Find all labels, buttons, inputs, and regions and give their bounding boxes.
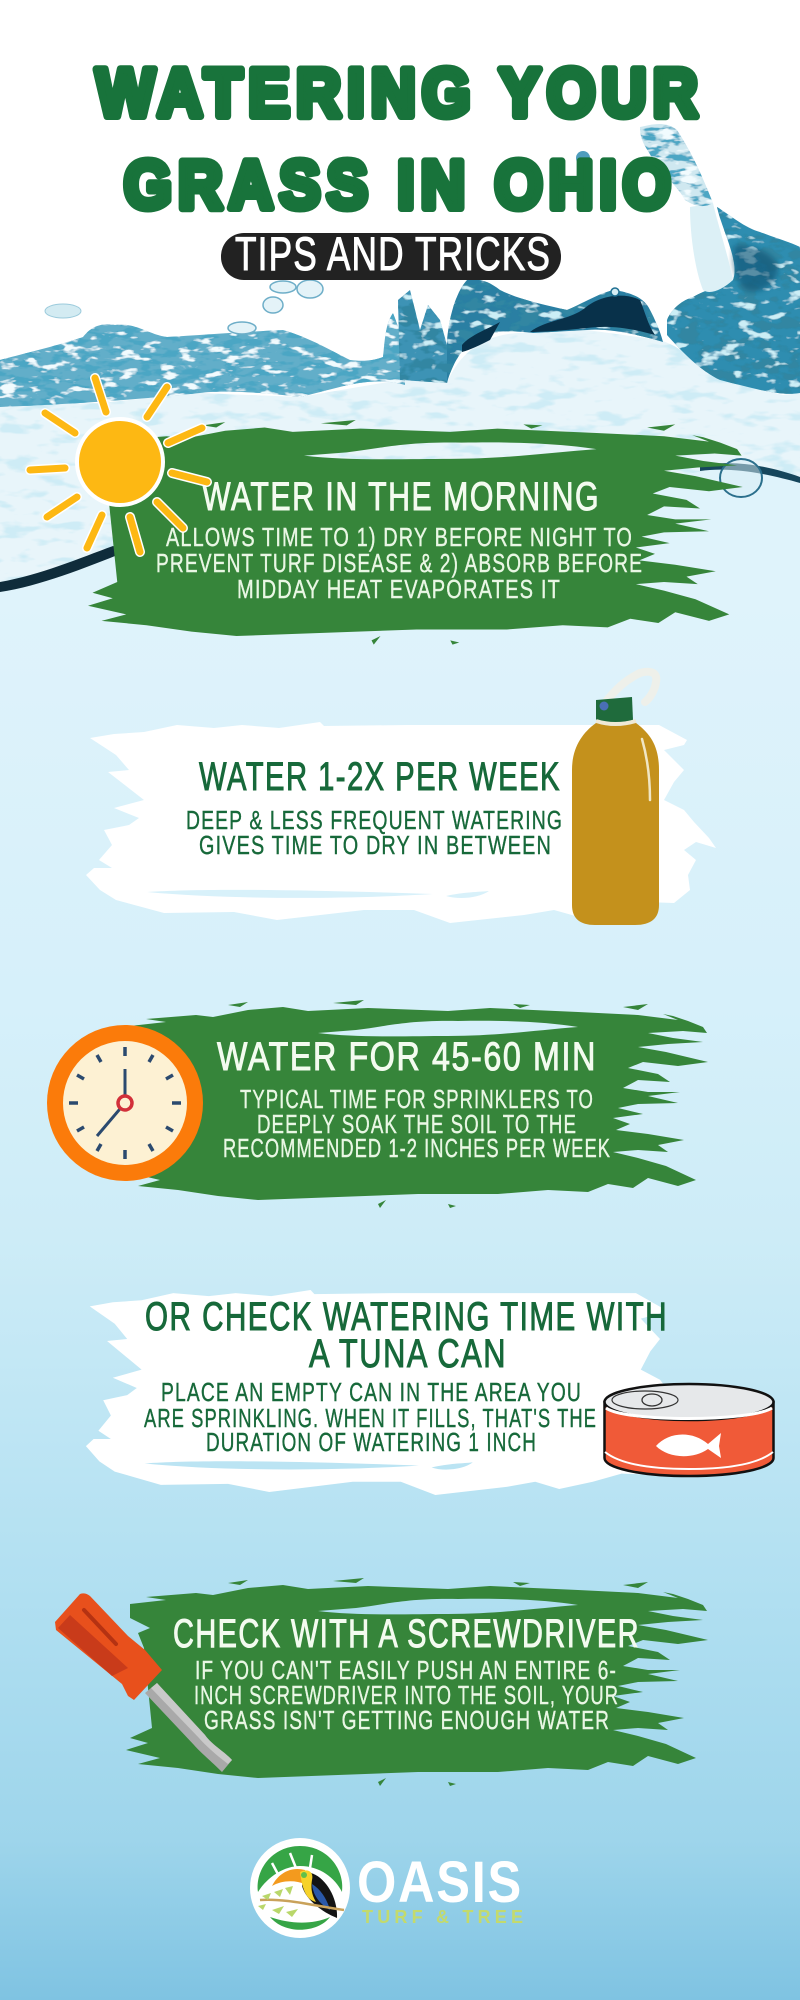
right splash mass xyxy=(667,207,800,394)
title: GRASS IN OHIO xyxy=(124,147,677,223)
right splash dark core xyxy=(733,245,778,291)
icon: tuna can xyxy=(604,1384,774,1476)
droplet on peak xyxy=(611,288,619,296)
water spout droplets xyxy=(640,124,713,206)
icon: clock xyxy=(47,1025,203,1181)
fish emblem xyxy=(656,1433,721,1458)
panel: check with a screwdriver xyxy=(126,1578,708,1786)
body text: RECOMMENDED 1-2 INCHES PER WEEK xyxy=(223,1133,611,1163)
central left spires xyxy=(398,290,447,383)
body text: INCH SCREWDRIVER INTO THE SOIL, YOUR xyxy=(194,1680,619,1710)
foam body of the water xyxy=(0,330,800,590)
branch with leaves xyxy=(260,1900,344,1910)
panel: water 1-2x per week xyxy=(86,722,716,923)
body text: DEEPLY SOAK THE SOIL TO THE xyxy=(257,1109,577,1139)
heading: WATER FOR 45-60 MIN xyxy=(217,1035,597,1079)
right surface line xyxy=(700,463,800,483)
green brush stroke xyxy=(126,1578,708,1786)
water surface dark line xyxy=(0,546,125,592)
body text: DURATION OF WATERING 1 INCH xyxy=(206,1427,537,1457)
green brush stroke xyxy=(88,420,743,645)
white brush stroke xyxy=(86,722,716,923)
body text xyxy=(144,1377,597,1457)
subtitle pill: TIPS AND TRICKS xyxy=(235,227,551,280)
icon: sun xyxy=(30,378,207,552)
white sky above the water xyxy=(0,0,800,590)
body text: DEEP & LESS FREQUENT WATERING xyxy=(186,805,563,835)
central splash peak xyxy=(447,279,663,383)
heading: CHECK WITH A SCREWDRIVER xyxy=(173,1612,640,1656)
body text: IF YOU CAN'T EASILY PUSH AN ENTIRE 6- xyxy=(195,1655,617,1685)
panel: water in the morning xyxy=(88,420,743,645)
left textured wave band xyxy=(0,313,405,407)
white brush stroke xyxy=(86,1290,691,1495)
heading: WATER 1-2X PER WEEK xyxy=(199,755,561,799)
body text xyxy=(186,805,563,860)
heading: WATER IN THE MORNING xyxy=(202,475,600,519)
pale water column xyxy=(690,203,733,292)
small dark shadow xyxy=(462,322,500,352)
body text: GRASS ISN'T GETTING ENOUGH WATER xyxy=(204,1705,610,1735)
heading: A TUNA CAN xyxy=(309,1332,507,1376)
title: WATERING YOUR xyxy=(96,55,704,131)
body text xyxy=(156,522,643,604)
heading xyxy=(145,1295,668,1376)
floating droplets centre xyxy=(228,280,323,334)
body text: MIDDAY HEAT EVAPORATES IT xyxy=(237,574,561,604)
water splash photo xyxy=(0,0,800,592)
logo tagline: TURF & TREE xyxy=(362,1907,523,1927)
body text: PREVENT TURF DISEASE & 2) ABSORB BEFORE xyxy=(156,548,643,578)
icon: screwdriver xyxy=(55,1593,232,1772)
panel: tuna can check xyxy=(86,1290,691,1495)
surface bubble ring xyxy=(720,459,762,497)
dark splash shadow xyxy=(530,296,655,335)
body text xyxy=(194,1655,619,1735)
icon: water bottle xyxy=(572,672,659,925)
body text: ARE SPRINKLING. WHEN IT FILLS, THAT'S THE xyxy=(144,1403,597,1433)
panel: water for 45-60 min xyxy=(126,1000,708,1208)
body text: TYPICAL TIME FOR SPRINKLERS TO xyxy=(240,1084,594,1114)
body text xyxy=(223,1084,611,1163)
floating droplet left xyxy=(45,304,81,318)
body text: GIVES TIME TO DRY IN BETWEEN xyxy=(199,830,552,860)
droplet behind title xyxy=(576,151,590,165)
logo name: OASIS xyxy=(357,1850,523,1915)
title xyxy=(96,55,704,223)
green brush stroke xyxy=(126,1000,708,1208)
body text: ALLOWS TIME TO 1) DRY BEFORE NIGHT TO xyxy=(166,522,633,552)
body text: PLACE AN EMPTY CAN IN THE AREA YOU xyxy=(161,1377,582,1407)
logo: oasis turf and tree xyxy=(250,1838,523,1938)
toucan xyxy=(302,1872,337,1918)
logo badge xyxy=(250,1838,350,1938)
